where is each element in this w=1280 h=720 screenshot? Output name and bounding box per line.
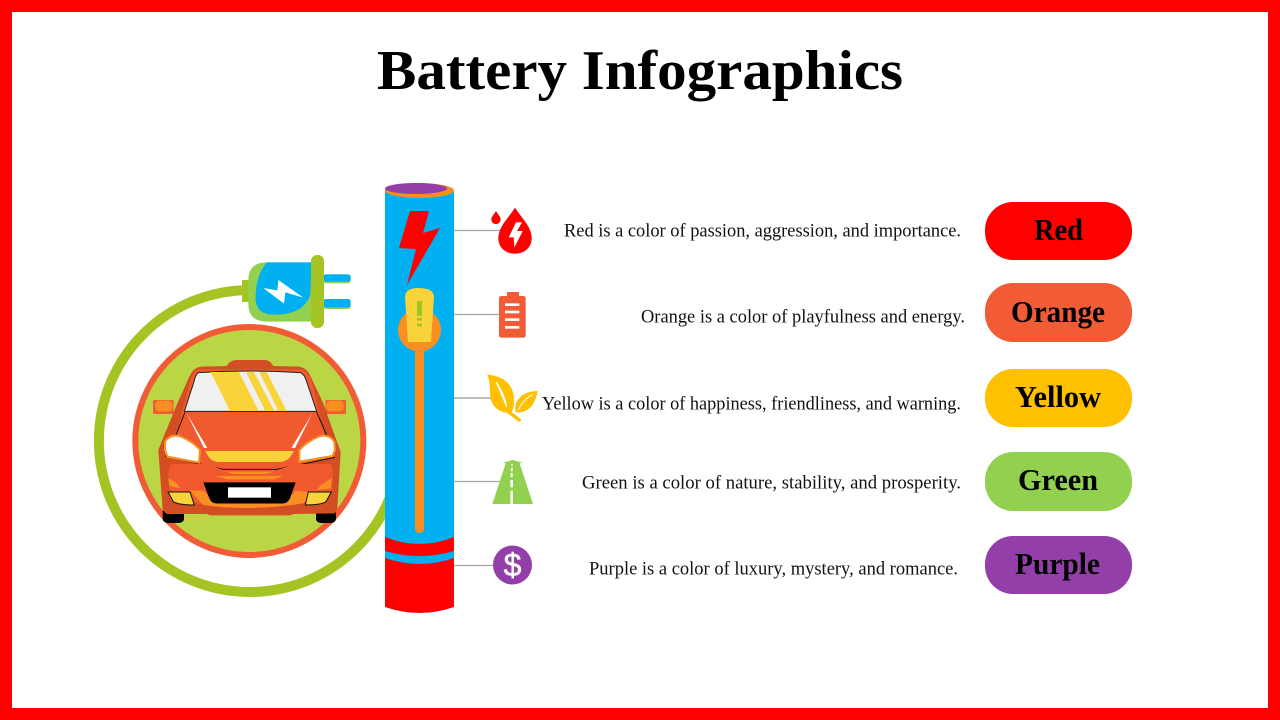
icon: dollar coin bbox=[493, 546, 532, 584]
battery red bolt bbox=[399, 211, 440, 285]
hood yellow strip bbox=[205, 451, 294, 462]
description: yellow: Yellow is a color of happiness, friendliness, and warning. bbox=[542, 394, 961, 414]
pill: orange bbox=[985, 283, 1132, 342]
icon: road bbox=[492, 460, 533, 504]
car wheels bbox=[163, 511, 336, 523]
number plate bbox=[228, 487, 271, 498]
battery base red bbox=[385, 537, 454, 613]
pill: orange: Orange bbox=[1011, 294, 1105, 329]
icon: leaves bbox=[487, 374, 538, 420]
pill: purple: Purple bbox=[1015, 546, 1100, 581]
pill: purple bbox=[985, 536, 1132, 594]
pill: yellow bbox=[985, 369, 1132, 427]
windshield bbox=[184, 371, 317, 411]
description: green: Green is a color of nature, stability, and prosperity. bbox=[582, 472, 961, 494]
car mirrors bbox=[153, 400, 346, 414]
description: red: Red is a color of passion, aggression, and importance. bbox=[564, 220, 961, 242]
plug bolt bbox=[263, 280, 303, 304]
icon: electric car badge bbox=[135, 327, 363, 555]
description: orange: Orange is a color of playfulness and energy. bbox=[641, 306, 965, 328]
battery top purple bbox=[385, 183, 447, 194]
battery charging stem bbox=[415, 345, 424, 533]
pill: green bbox=[985, 452, 1132, 511]
badge circle bbox=[135, 327, 363, 555]
plug cord stub bbox=[242, 280, 249, 302]
hood lines bbox=[176, 412, 327, 448]
pill: red: Red bbox=[1034, 212, 1083, 247]
pill: green: Green bbox=[1018, 462, 1098, 497]
battery top orange bbox=[385, 183, 454, 198]
plug body bbox=[248, 262, 313, 322]
connector lines bbox=[454, 230, 500, 566]
battery body bbox=[385, 190, 454, 560]
hood edge line bbox=[165, 456, 335, 469]
battery plug head bbox=[405, 288, 434, 342]
lower bumper bbox=[168, 464, 333, 507]
battery blue band bbox=[385, 551, 454, 564]
windshield stripes bbox=[211, 372, 287, 411]
plug plate bbox=[311, 255, 324, 328]
pill: red bbox=[985, 202, 1132, 260]
bumper accents bbox=[168, 472, 332, 508]
description: purple: Purple is a color of luxury, mystery, and romance. bbox=[589, 558, 958, 580]
icon: blood drop bbox=[491, 208, 532, 254]
charging cable ring bbox=[99, 290, 392, 592]
grille bbox=[203, 482, 296, 503]
battery bbox=[385, 183, 454, 613]
icon: plug bbox=[242, 255, 351, 328]
battery plug socket bbox=[398, 308, 441, 352]
right headlight bbox=[299, 436, 335, 462]
left headlight bbox=[165, 436, 200, 463]
car upper shell bbox=[165, 369, 335, 469]
car body bbox=[158, 360, 341, 515]
plug blue face bbox=[256, 262, 312, 315]
title: Battery Infographics bbox=[377, 40, 903, 102]
pill: yellow: Yellow bbox=[1015, 379, 1102, 414]
icon: battery bbox=[499, 292, 526, 338]
battery plug marks bbox=[417, 301, 422, 326]
plug prongs bbox=[323, 274, 351, 309]
icon: dollar coin: $ bbox=[504, 547, 522, 583]
fog lamps bbox=[168, 492, 331, 505]
